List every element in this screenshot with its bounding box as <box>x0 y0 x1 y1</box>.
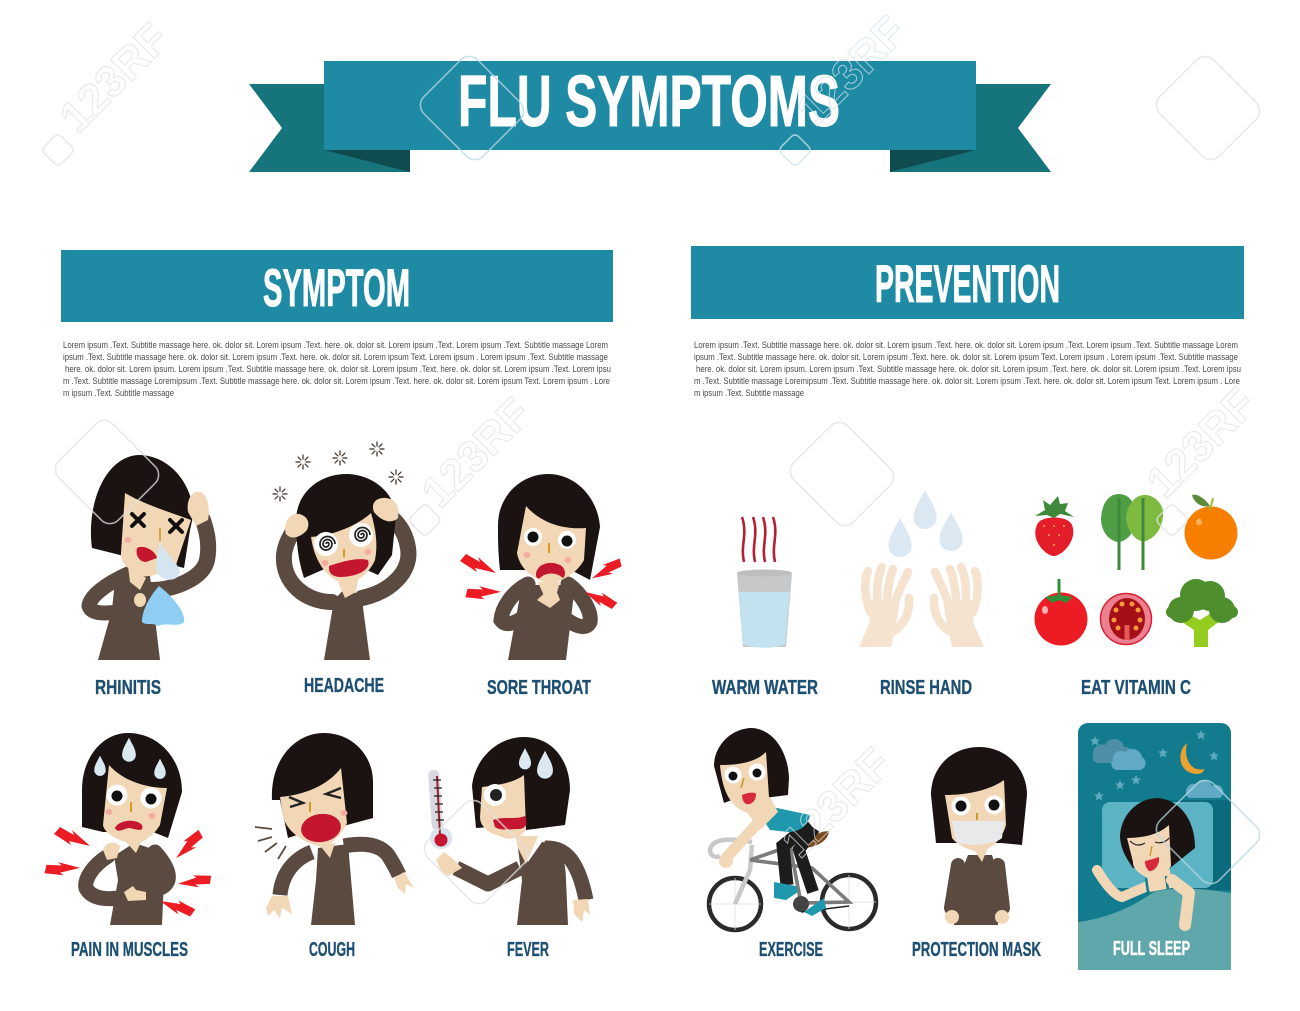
icon: orange <box>1184 495 1238 560</box>
text block: symptom description: m ipsum .Text. Subtitle massage <box>63 388 174 399</box>
icon: stars <box>1090 730 1219 800</box>
watermarks: 123RF <box>50 14 178 142</box>
icon: vitamin c foods <box>1034 494 1238 647</box>
icon: warm water glass <box>737 517 792 648</box>
figure: fever <box>428 737 590 925</box>
figure: rhinitis <box>89 455 209 660</box>
panel: symptom heading <box>61 250 613 322</box>
label: headache: HEADACHE <box>304 675 384 697</box>
icon: cough lines <box>255 827 286 859</box>
figure: protection mask <box>931 747 1027 925</box>
pillow <box>1102 802 1213 888</box>
title: FLU SYMPTOMS <box>458 62 840 142</box>
icon: bicycle <box>709 831 876 930</box>
title banner <box>249 61 1051 172</box>
icon: thermometer <box>428 770 452 849</box>
figure: exercise cyclist <box>709 728 876 930</box>
icon: tomato <box>1034 579 1088 646</box>
text block: symptom description <box>63 340 611 399</box>
watermarks: 123RF <box>787 7 915 135</box>
label: full sleep: FULL SLEEP <box>1113 938 1190 960</box>
watermarks: 123RF <box>772 739 900 867</box>
label: cough: COUGH <box>309 939 355 961</box>
label: eat vitamin c: EAT VITAMIN C <box>1081 677 1191 699</box>
panel: symptom heading: SYMPTOM <box>263 259 410 318</box>
icon: spinach <box>1101 494 1163 570</box>
icon: broccoli <box>1166 579 1238 647</box>
panel: prevention heading <box>691 246 1244 319</box>
label: sore throat: SORE THROAT <box>487 677 591 699</box>
text block: prevention description <box>694 340 1241 399</box>
icon: dizzy sparkles <box>273 442 403 501</box>
figure: pain in muscles <box>41 733 215 925</box>
label: exercise: EXERCISE <box>759 939 823 961</box>
text block: symptom description: Lorem ipsum .Text. Subtitle massage here. ok. dolor sit. Lorem ipsum .Text. here. ok. dolor sit. Lorem ipsum .Text. Lorem ipsum .Text. Subtitle massage Lorem <box>63 340 608 351</box>
panel: prevention heading: PREVENTION <box>875 255 1060 314</box>
figure: headache <box>273 442 408 660</box>
text block: symptom description: m .Text. Subtitle massage Loremipsum .Text. Subtitle massage here. ok. dolor sit. Lorem ipsum .Text. here. ok. dolor sit. Lorem ipsum Text. Lorem ipsum . Lore <box>63 376 610 387</box>
figure: cough <box>255 733 414 925</box>
label: rhinitis: RHINITIS <box>95 677 161 699</box>
figure: sore throat <box>460 474 625 660</box>
icon: rinsing hands <box>859 490 984 647</box>
label: warm water: WARM WATER <box>712 677 818 699</box>
panel: full sleep <box>1078 723 1231 970</box>
icon: face mask <box>952 821 1004 845</box>
text block: prevention description: m ipsum .Text. Subtitle massage <box>694 388 804 399</box>
icon: strawberry <box>1035 496 1074 556</box>
icon: moon <box>1180 743 1204 774</box>
text block: symptom description: here. ok. dolor sit. Lorem ipsum. Lorem ipsum .Text. Subtitle massage here. ok. dolor sit. Lorem ipsum .Text. here. ok. dolor sit. Lorem ipsum .Text. Lorem ipsu <box>65 364 611 375</box>
label: protection mask: PROTECTION MASK <box>912 939 1041 961</box>
icon: tomato slice <box>1100 594 1152 644</box>
text block: symptom description: ipsum .Text. Subtitle massage here. ok. dolor sit. Lorem ipsum .Text. here. ok. dolor sit. Lorem ipsum Text. Lorem ipsum . Lorem ipsum .Text. Subtitle massage <box>63 352 608 363</box>
label: rinse hand: RINSE HAND <box>880 677 972 699</box>
label: pain in muscles: PAIN IN MUSCLES <box>71 939 188 961</box>
watermarks: 123RF <box>412 389 540 517</box>
icon: clouds <box>1093 739 1223 798</box>
label: fever: FEVER <box>507 939 549 961</box>
watermarks: 123RF <box>1137 379 1265 507</box>
